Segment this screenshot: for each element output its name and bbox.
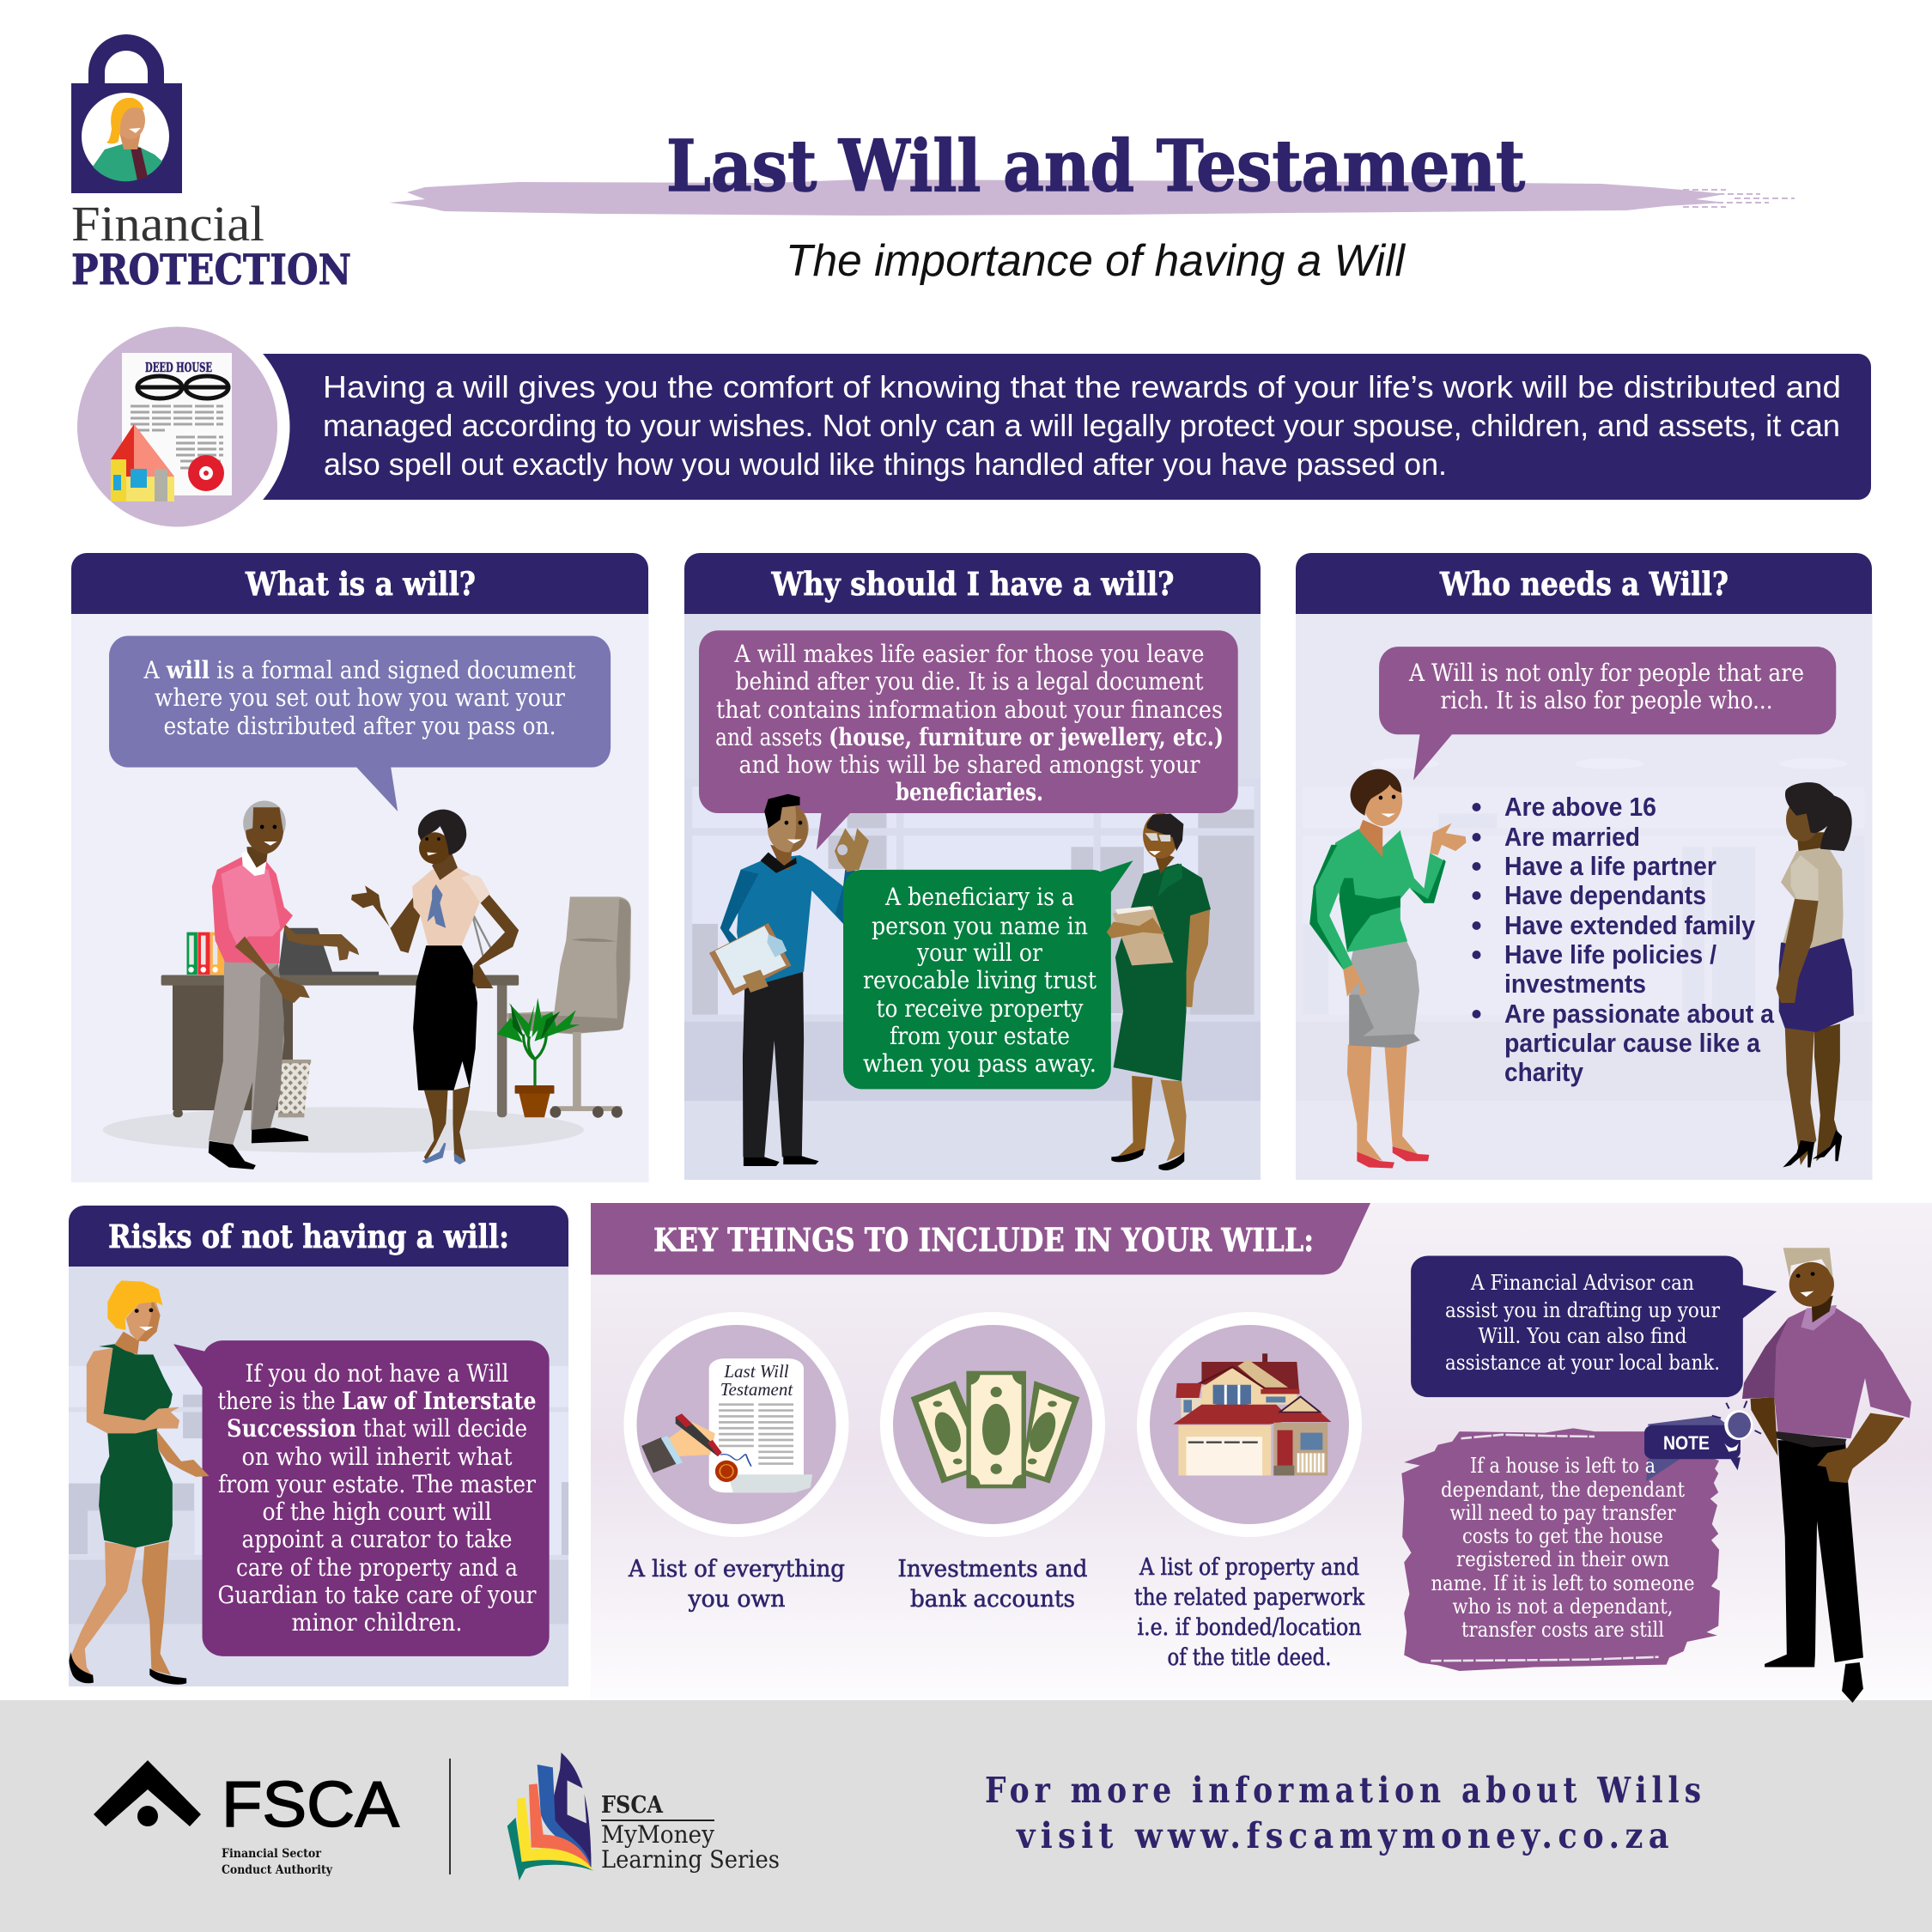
character: woman from behind [1776,782,1854,1167]
background: city buildings [684,778,1261,1101]
speech bubble: purple: beneficiaries. [896,778,1043,806]
speech bubble: purple: A will makes life easier for those you leave [734,640,1204,668]
speech bubble [173,1340,550,1656]
speech bubble: purple: behind after you die. It is a legal document [735,667,1204,696]
illustration: office scene [103,800,631,1170]
note text: transfer costs are still [1461,1618,1664,1642]
character: man with clipboard [709,794,869,1166]
character: blonde woman [69,1280,210,1685]
label: the related paperwork [1134,1584,1365,1611]
character: woman in green [1309,769,1467,1168]
speech bubble [109,636,611,811]
icon: book [507,1753,593,1880]
item: investments and bank accounts [880,1312,1105,1613]
speech bubble: A Will is not only for people that are [1408,659,1804,687]
speech bubble: purple: and how this will be shared amongst your [738,750,1200,779]
note text: If a house is left to a [1470,1454,1656,1478]
label [628,1556,845,1613]
callout: financial advisor: Will. You can also find [1479,1324,1686,1348]
label: i.e. if bonded/location [1137,1614,1362,1641]
label: you own [688,1586,785,1613]
speech bubble: from your estate. The master [218,1470,537,1498]
logo: MyMoney Learning Series: FSCA [601,1792,664,1819]
logo: MyMoney Learning Series [507,1753,780,1880]
list of who needs a will: Are passionate about a [1504,999,1775,1029]
label: Investments and [898,1556,1087,1583]
note text: name. If it is left to someone [1431,1571,1695,1595]
label [898,1556,1087,1613]
panel: what is a will [71,553,649,1182]
panel: risks of not having a will [69,1206,568,1686]
label: A list of everything [628,1556,845,1583]
logo text: Financial [71,196,264,252]
speech bubble: appoint a curator to take [242,1525,512,1553]
brush panel [1401,1428,1720,1671]
item: list of property [1134,1312,1365,1671]
speech bubble: beneficiary: person you name in [872,912,1088,940]
logo text [71,196,351,295]
banner text: also spell out exactly how you would like things handled after you have passed on. [324,447,1447,482]
heading: Risks of not having a will: [108,1218,509,1255]
speech bubble: beneficiary: from your estate [890,1022,1070,1050]
speech bubble: on who will inherit what [242,1443,513,1471]
logo: FSCA: Financial Sector [222,1847,322,1861]
list of who needs a will: particular cause like a [1504,1028,1761,1058]
callout: financial advisor [1411,1256,1777,1397]
speech bubble: purple [699,630,1238,850]
note text: dependant, the dependant [1441,1478,1685,1502]
speech bubble: Guardian to take care of your [218,1581,537,1609]
call to action: For more information about Wills [985,1770,1706,1811]
list of who needs a will: Have dependants [1504,880,1706,910]
logo: MyMoney Learning Series: MyMoney [601,1820,714,1849]
speech bubble: beneficiary: A beneficiary is a [884,883,1074,911]
icon: padlock bag with woman [71,34,182,193]
speech bubble: where you set out how you want your [155,683,566,712]
note text: registered in their own [1456,1547,1669,1571]
logo: financial protection [71,34,351,295]
item: list of everything you own: Last Will [723,1361,789,1382]
call to action: visit www.fscamymoney.co.za [1016,1815,1674,1856]
panel: key things to include [591,1203,1932,1700]
character: financial advisor [1742,1248,1911,1668]
callout: financial advisor: assist you in drafting up your [1445,1298,1720,1322]
speech bubble: If you do not have a Will [246,1359,509,1388]
callout: financial advisor: assistance at your local bank. [1445,1351,1720,1375]
speech bubble: purple: that contains information about your finances [716,696,1223,724]
list of who needs a will: charity [1504,1057,1584,1087]
banner text [323,369,1841,482]
heading band [591,1203,1370,1274]
banner text: managed according to your wishes. Not only can a will legally protect your spouse, children, and assets, it can [323,408,1840,443]
note text: who is not a dependant, [1453,1595,1673,1619]
title brush stroke [389,179,1795,216]
item: list of everything you own [623,1312,848,1613]
list of who needs a will: investments [1504,969,1646,999]
speech bubble: beneficiary: to receive property [876,994,1084,1023]
banner text: Having a will gives you the comfort of knowing that the rewards of your life’s work will be distributed and [323,369,1841,404]
note badge with bulb: NOTE [1663,1432,1710,1454]
subtitle: The importance of having a Will [786,236,1406,286]
speech bubble: beneficiary: when you pass away. [863,1049,1097,1078]
list of who needs a will: Have a life partner [1504,851,1716,881]
logo: MyMoney Learning Series: Learning Series [601,1845,780,1874]
logo: FSCA: Conduct Authority [222,1863,333,1877]
speech bubble: beneficiary: your will or [916,939,1043,967]
call to action [985,1770,1706,1856]
list of who needs a will: Have life policies / [1504,939,1716,969]
speech bubble: Succession that will decide [227,1414,527,1443]
intro banner [65,314,1871,539]
character: woman with folder [1107,813,1211,1170]
note badge with bulb [1644,1401,1761,1481]
label: bank accounts [910,1586,1075,1613]
note box [1401,1401,1761,1671]
label [1134,1554,1365,1671]
list of who needs a will [1472,792,1775,1087]
speech bubble: minor children. [292,1608,462,1637]
list of who needs a will: Are above 16 [1504,792,1656,822]
heading: Who needs a Will? [1439,565,1728,603]
note text: will need to pay transfer [1449,1501,1676,1525]
heading: KEY THINGS TO INCLUDE IN YOUR WILL: [653,1221,1314,1259]
speech bubble: of the high court will [263,1498,492,1526]
speech bubble: estate distributed after you pass on. [163,712,556,740]
list of who needs a will: Are married [1504,822,1640,852]
footer [0,1700,1932,1932]
heading: What is a will? [245,565,476,603]
label: of the title deed. [1168,1644,1331,1671]
advisor shoe overlapping footer [1842,1662,1863,1703]
note text: costs to get the house [1462,1524,1663,1548]
speech bubble: there is the Law of Interstate [218,1387,536,1415]
speech bubble: beneficiary: revocable living trust [863,966,1097,994]
speech bubble: rich. It is also for people who... [1441,686,1772,714]
callout: financial advisor: A Financial Advisor can [1470,1271,1694,1295]
panel: why should I have a will [684,553,1261,1180]
logo text: PROTECTION [71,245,351,295]
speech bubble: beneficiary [843,860,1133,1089]
panel: who needs a will [1296,553,1873,1180]
logo: FSCA [94,1760,399,1877]
background: city [69,1366,568,1624]
speech bubble: purple: and assets (house, furniture or jewellery, etc.) [715,723,1224,751]
logo: FSCA: FSCA [222,1768,399,1840]
icon: deed house [77,326,277,527]
heading: Why should I have a will? [771,565,1175,603]
note text [1431,1454,1695,1642]
label: A list of property and [1139,1554,1359,1581]
background: faint city [1296,758,1873,1101]
speech bubble [1379,647,1836,781]
title: Last Will and Testament [666,125,1525,208]
speech bubble: care of the property and a [236,1553,518,1582]
speech bubble: A will is a formal and signed document [143,656,576,684]
list of who needs a will: Have extended family [1504,910,1756,940]
item: list of everything you own: Testament [720,1379,793,1400]
icon: deed house: DEED HOUSE [145,360,212,375]
